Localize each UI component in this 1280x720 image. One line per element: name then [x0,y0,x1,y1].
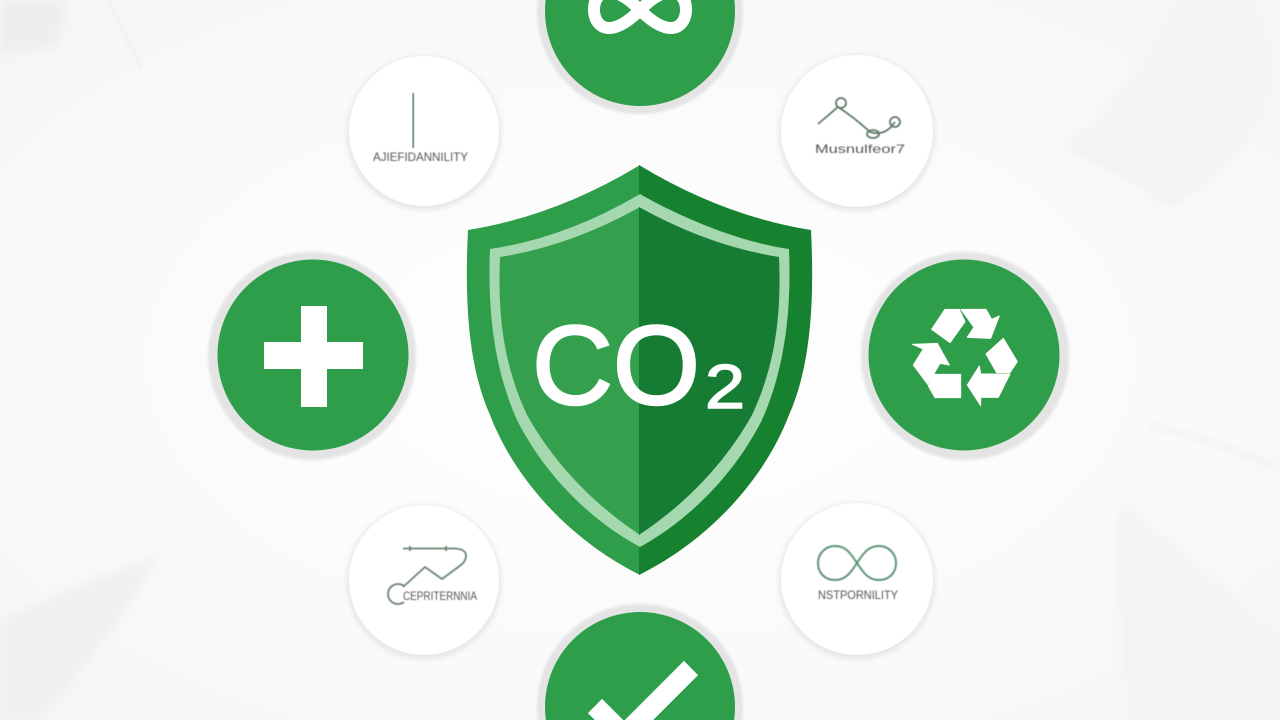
shield inner right [639,207,780,535]
CO2 label: CO [532,303,700,428]
white circle: bottom right [779,503,935,659]
shield inner left [499,207,640,535]
CO2 shield [467,165,812,575]
shield light border [489,194,790,547]
icon: path line with hook [388,546,466,604]
icon: check mark [595,668,691,720]
white circle: top right [779,55,935,211]
label: bottom right: NSTPORNILITY [818,588,898,602]
white circle: top left [347,56,501,210]
icon: infinity [594,0,686,28]
green circle: left with plus [208,252,416,460]
green circle: top with infinity [537,0,743,114]
shield outer left [467,165,640,575]
label: top right: Musnulfeor7 [815,142,905,156]
label: bottom left: CEPRITERNNIA [403,589,477,603]
icon: infinity outline [818,546,896,580]
icon: vertical line [412,93,414,148]
label: top left: AJIEFIDANNILITY [373,150,468,164]
icon: line graph with nodes [818,98,900,138]
shield outer right [639,165,812,575]
icon: recycle [912,309,1017,406]
green circle: bottom with check [537,604,743,720]
CO2 label: 2 [705,353,745,422]
green circle: right with recycle [861,252,1069,460]
icon: plus [264,306,363,407]
white circle: bottom left [347,505,501,659]
